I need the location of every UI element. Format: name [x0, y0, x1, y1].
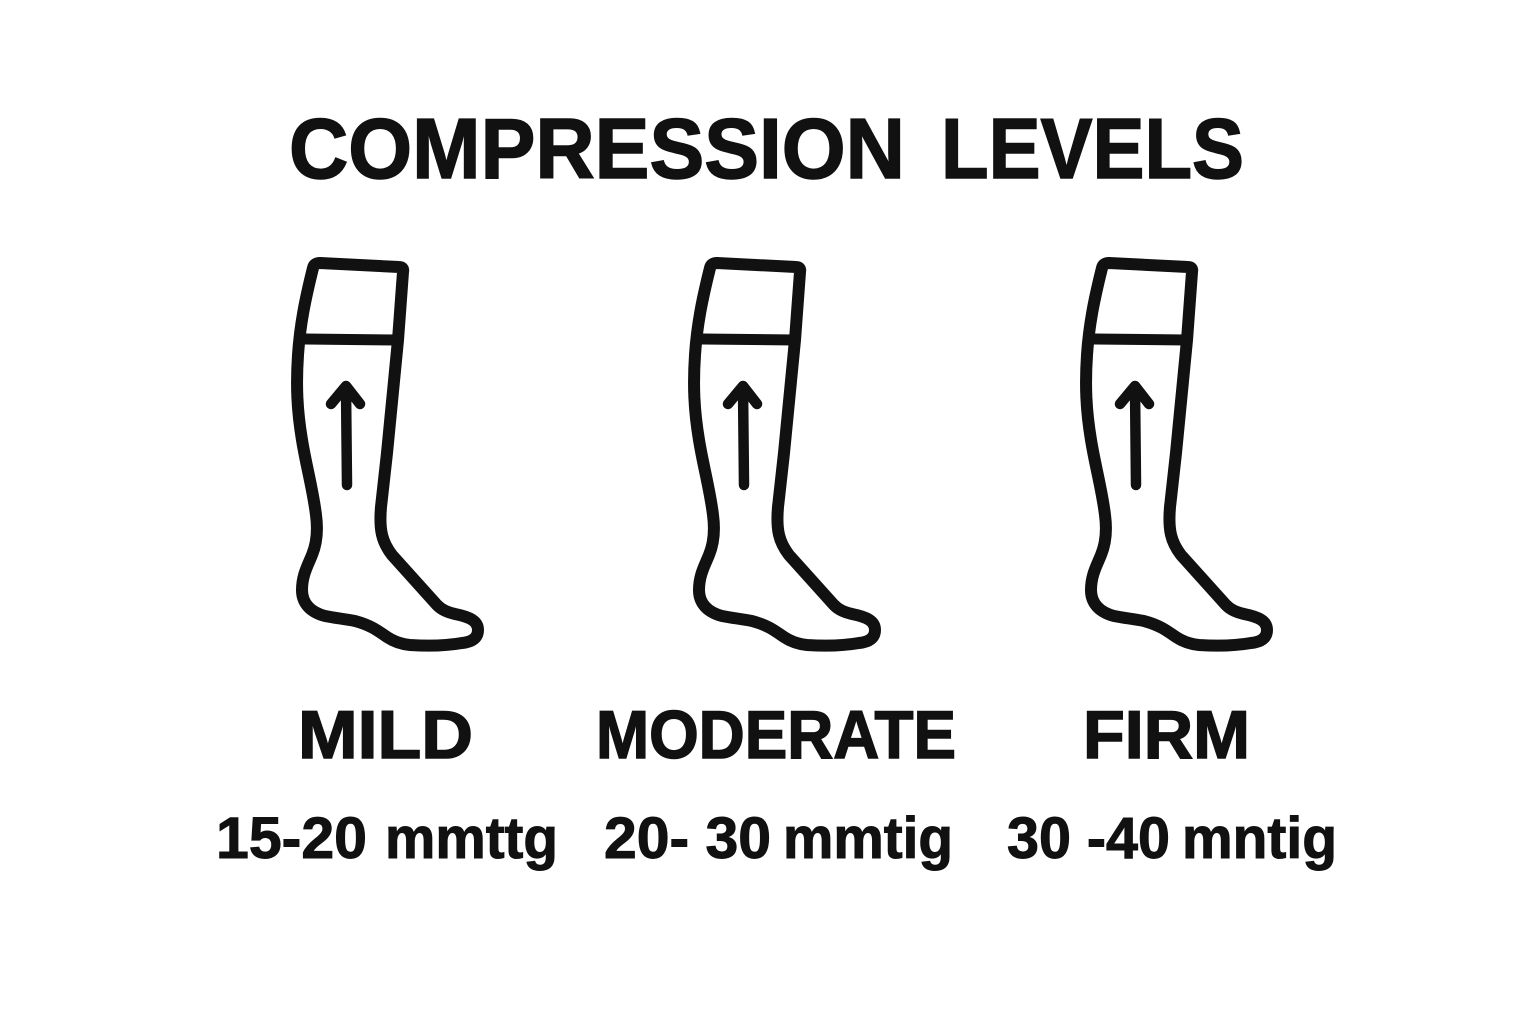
value: moderate range: 20- 30: [604, 806, 771, 871]
label: firm: FIRM: [1083, 697, 1250, 773]
value: firm range: 30 -40: [1007, 806, 1170, 871]
title: [289, 102, 1244, 197]
value: mild range: [216, 806, 558, 871]
value: moderate range: [604, 806, 953, 871]
value: mild range: 15-20: [216, 806, 367, 871]
title: LEVELS: [941, 102, 1244, 197]
label: mild: MILD: [298, 697, 473, 773]
value: firm range: [1007, 806, 1337, 871]
value: moderate range: mmtig: [783, 806, 953, 871]
title: COMPRESSION: [289, 102, 905, 197]
value: firm range: mntig: [1182, 806, 1337, 871]
icon: firm compression sock: [1086, 263, 1267, 646]
icon: mild compression sock: [297, 263, 478, 646]
label: moderate: MODERATE: [596, 697, 956, 773]
value: mild range: mmttg: [385, 806, 558, 871]
icon: moderate compression sock: [694, 263, 875, 646]
